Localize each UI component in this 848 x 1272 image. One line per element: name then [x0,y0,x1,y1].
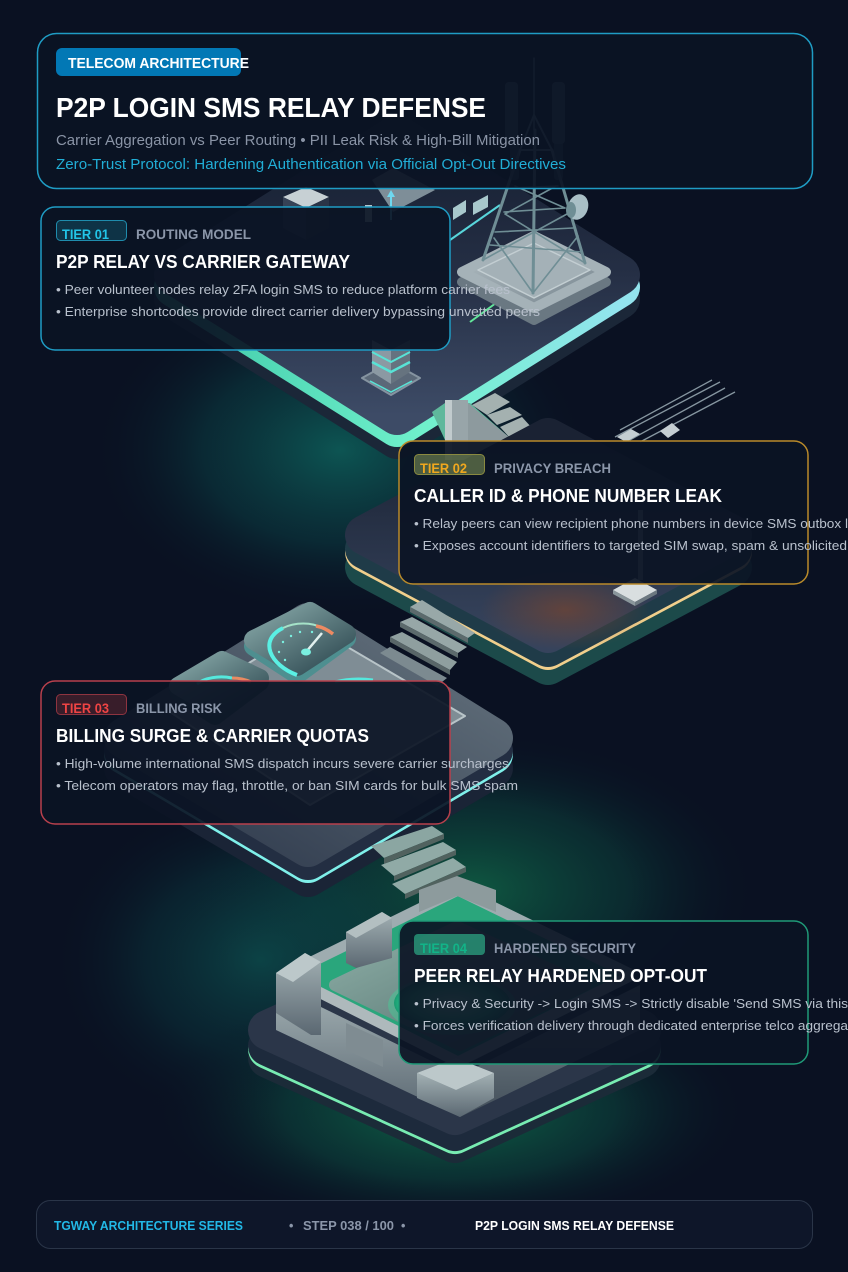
panel: tier 01 routing model [41,207,540,350]
illustration: platform 4 hardened shield [268,876,641,1143]
gauge: left [178,660,260,716]
illustration: platform 2 privacy breach [365,380,735,665]
illustration: connector stairs 1 [432,393,532,460]
tier badge: TIER 03 [62,701,109,716]
category badge: TELECOM ARCHITECTURE [68,56,249,72]
gauge: speed dial [254,612,346,675]
tier badge [414,454,484,476]
bullet list [56,757,518,793]
step counter: • [289,1219,293,1233]
bullet list [414,517,848,553]
tower base [462,236,606,320]
footer title: P2P LOGIN SMS RELAY DEFENSE [475,1219,674,1233]
bullet list: • Exposes account identifiers to targeted SIM swap, spam & unsolicited [414,539,847,553]
header panel [38,34,812,188]
card title: BILLING SURGE & CARRIER QUOTAS [56,725,369,746]
step counter: • [401,1219,405,1233]
illustration: connector stairs 3 [371,826,466,899]
silver walls [276,876,640,1117]
shield floor and disc [295,893,620,1060]
main title: P2P LOGIN SMS RELAY DEFENSE [56,92,486,123]
bullet list [414,997,848,1033]
illustration: platform 3 billing gauges [124,612,493,877]
bullet list: • Telecom operators may flag, throttle, or ban SIM cards for bulk SMS spam [56,779,518,793]
metal post [613,510,657,606]
bullet list: • Relay peers can view recipient phone numbers in device SMS outbox l [414,517,848,531]
footer bar [36,1200,812,1248]
network cables [615,380,735,442]
category label: HARDENED SECURITY [494,941,636,956]
category label: PRIVACY BREACH [494,461,611,476]
tier badge: TIER 01 [62,227,109,242]
tier badge: TIER 04 [420,941,467,956]
bullet list: • High-volume international SMS dispatch incurs severe carrier surcharges [56,757,509,771]
category label: BILLING RISK [136,701,222,716]
microwave dish [564,192,592,222]
step counter: STEP 038 / 100 [303,1219,394,1233]
tower antennas [505,82,565,180]
panel: tier 04 hardened security [399,921,848,1064]
bullet list: • Enterprise shortcodes provide direct carrier delivery bypassing unvetted peers [56,305,540,319]
panel: tier 02 privacy breach [399,441,848,584]
server stack [362,340,420,395]
subtitle: Carrier Aggregation vs Peer Routing • PII Leak Risk & High-Bill Mitigation [56,132,540,149]
gauge: right arc [335,679,373,682]
tier badge [56,220,126,242]
bullet list: • Forces verification delivery through dedicated enterprise telco aggrega [414,1019,848,1033]
category label: ROUTING MODEL [136,227,251,242]
bullet list: • Privacy & Security -> Login SMS -> Strictly disable 'Send SMS via this [414,997,848,1011]
category badge [56,48,249,76]
series name: TGWAY ARCHITECTURE SERIES [54,1219,243,1233]
bullet list: • Peer volunteer nodes relay 2FA login SMS to reduce platform carrier fees [56,283,510,297]
bullet list [56,283,540,319]
card title: CALLER ID & PHONE NUMBER LEAK [414,485,723,506]
tier badge [414,934,485,956]
tier badge: TIER 02 [420,461,467,476]
panel: tier 03 billing risk [41,681,518,824]
illustration: connector stairs 2 [380,600,475,686]
tier badge [56,694,126,716]
illustration: platform 1 telecom tower and routing [174,58,620,439]
protocol line: Zero-Trust Protocol: Hardening Authentication via Official Opt-Out Directives [56,156,566,173]
card title: P2P RELAY VS CARRIER GATEWAY [56,251,351,272]
card title: PEER RELAY HARDENED OPT-OUT [414,965,708,986]
tower lattice [483,58,585,293]
